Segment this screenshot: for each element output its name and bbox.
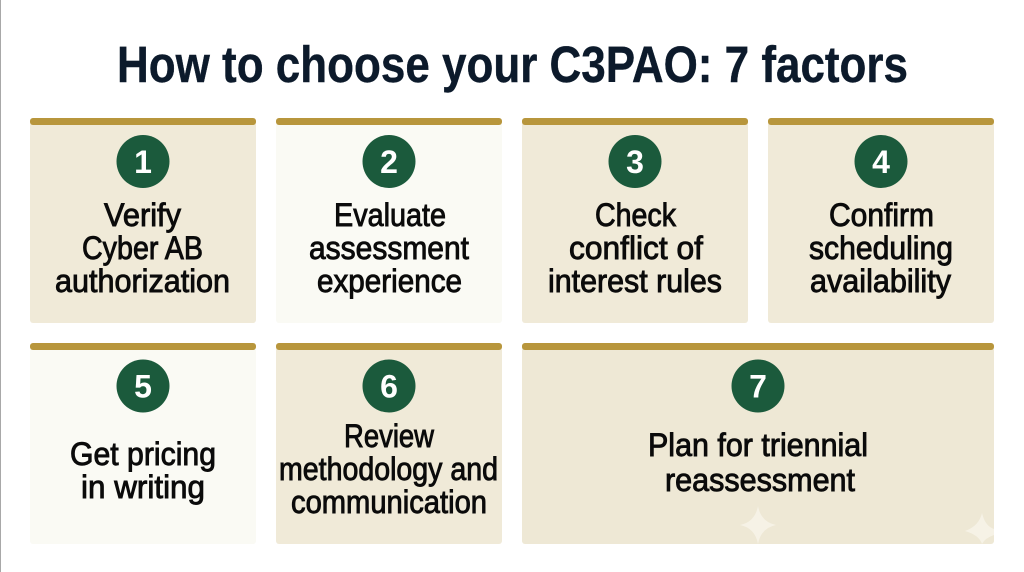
text: factor 6 label: methodology and xyxy=(279,451,498,487)
text: factor 4 label: scheduling xyxy=(809,230,953,266)
icon: number 6: 6 xyxy=(380,368,398,404)
icon: number 4 xyxy=(854,135,908,188)
icon: number 4: 4 xyxy=(872,144,890,180)
text: factor 6 label: communication xyxy=(291,484,487,520)
panel: factor 1 xyxy=(30,118,256,323)
text: factor 2 label: Evaluate xyxy=(334,197,446,233)
icon: sparkle left xyxy=(740,506,776,544)
text: factor 2 label: experience xyxy=(317,263,462,299)
panel: factor 7 xyxy=(522,343,994,544)
text: factor 1 label xyxy=(55,197,230,299)
text: factor 5 label: Get pricing xyxy=(70,436,216,472)
icon: number 7: 7 xyxy=(749,368,767,404)
text: factor 4 label: availability xyxy=(810,263,951,299)
text: factor 3 label xyxy=(548,197,722,299)
icon: sparkle right xyxy=(965,513,994,544)
icon: number 1 xyxy=(116,135,170,188)
text: factor 6 label: Review xyxy=(344,418,435,454)
icon: number 2: 2 xyxy=(380,144,398,180)
panel: factor 3 xyxy=(522,118,748,323)
text: factor 2 label xyxy=(309,197,469,299)
icon: number 3 xyxy=(608,135,662,188)
text: factor 4 label: Confirm xyxy=(829,197,934,233)
text: factor 3 label: conflict of xyxy=(569,230,703,266)
text: factor 1 label: authorization xyxy=(55,263,230,299)
text: factor 2 label: assessment xyxy=(309,230,469,266)
title: How to choose your C3PAO: 7 factors xyxy=(117,36,908,93)
icon: number 1: 1 xyxy=(134,144,152,180)
panel: factor 6 xyxy=(276,343,502,544)
text: factor 6 label xyxy=(279,418,498,520)
text: factor 7 label: Plan for triennial xyxy=(648,427,868,463)
icon: number 2 xyxy=(362,135,416,188)
panel: factor 2 xyxy=(276,118,502,323)
icon: number 3: 3 xyxy=(626,144,644,180)
panel: factor 5 xyxy=(30,343,256,544)
text: factor 3 label: Check xyxy=(595,197,677,233)
text: factor 1 label: Verify xyxy=(104,197,181,233)
icon: number 5: 5 xyxy=(134,368,152,404)
text: factor 7 label xyxy=(648,427,868,498)
text: factor 4 label xyxy=(809,197,953,299)
panel: factor 4 xyxy=(768,118,994,323)
text: factor 7 label: reassessment xyxy=(665,462,855,498)
text: factor 1 label: Cyber AB xyxy=(82,230,203,266)
icon: number 7 xyxy=(732,360,784,412)
text: factor 5 label: in writing xyxy=(81,469,205,505)
text: factor 5 label xyxy=(70,436,216,505)
icon: number 5 xyxy=(116,360,170,412)
text: factor 3 label: interest rules xyxy=(548,263,722,299)
icon: number 6 xyxy=(362,360,416,412)
